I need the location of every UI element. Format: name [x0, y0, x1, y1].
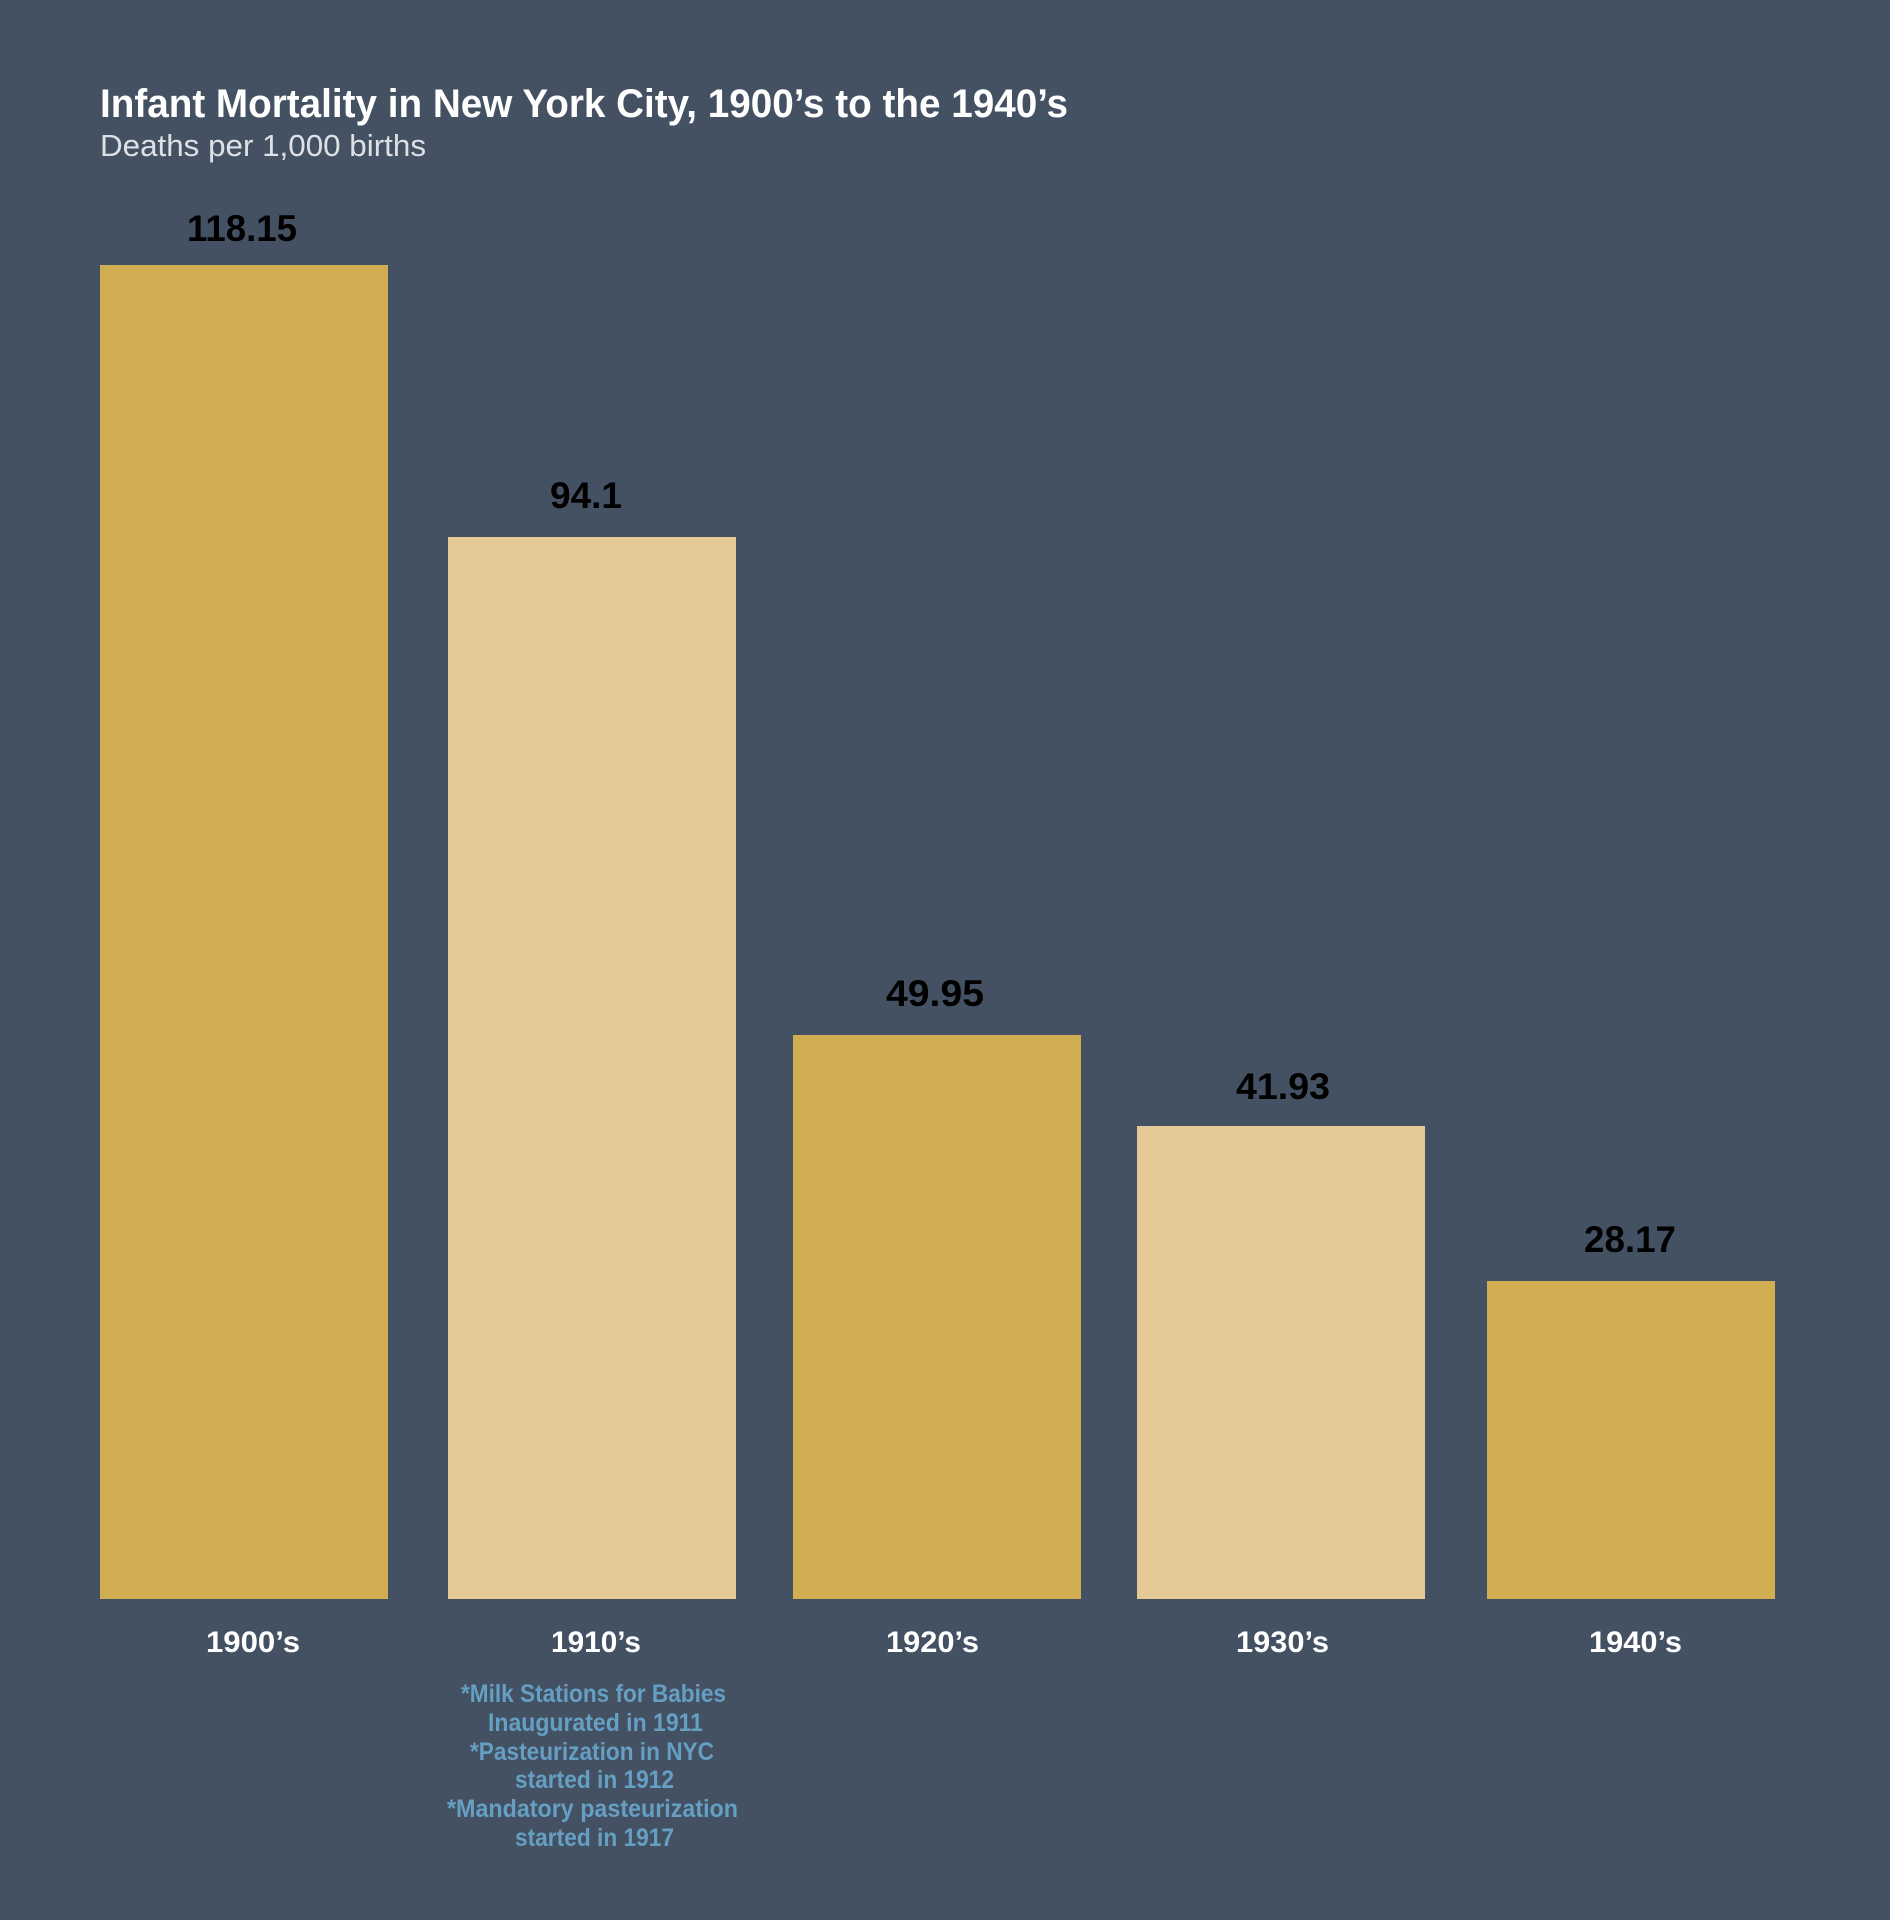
- bar: 1900's: 118.15: [187, 208, 297, 249]
- annotation: milk stations and pasteurization notes: *Mandatory pasteurization: [447, 1795, 738, 1823]
- bar: 1940's: 28.17: [1584, 1219, 1676, 1260]
- bar: 1910's: [448, 475, 736, 1659]
- title: Infant Mortality in New York City, 1900’s to the 1940’s: [100, 82, 1068, 126]
- bar: 1900's: 1900’s: [206, 1626, 300, 1659]
- bar chart: [100, 208, 1775, 1659]
- bar: 1920's: [793, 973, 1081, 1659]
- bar: 1930's: [1137, 1066, 1425, 1659]
- bar: 1900's: [100, 208, 388, 1659]
- subtitle: Deaths per 1,000 births: [100, 128, 426, 163]
- bar: 1930's: 41.93: [1236, 1066, 1330, 1107]
- bar: 1930's: 1930’s: [1236, 1626, 1329, 1659]
- annotation: milk stations and pasteurization notes: *Pasteurization in NYC: [470, 1738, 714, 1766]
- annotation: milk stations and pasteurization notes: started in 1917: [515, 1824, 674, 1852]
- bar: 1910's: 1910’s: [551, 1626, 641, 1659]
- bar: 1940's: [1487, 1219, 1775, 1659]
- bar: 1910's: 94.1: [550, 475, 622, 516]
- bar: 1920's: 1920’s: [886, 1626, 979, 1659]
- annotation: milk stations and pasteurization notes: *Milk Stations for Babies: [461, 1680, 726, 1708]
- bar: 1920's: 49.95: [886, 973, 984, 1014]
- annotation: milk stations and pasteurization notes: Inaugurated in 1911: [488, 1709, 703, 1737]
- bar: 1940's: 1940’s: [1589, 1626, 1682, 1659]
- annotation: milk stations and pasteurization notes: [447, 1680, 738, 1852]
- annotation: milk stations and pasteurization notes: started in 1912: [515, 1766, 674, 1794]
